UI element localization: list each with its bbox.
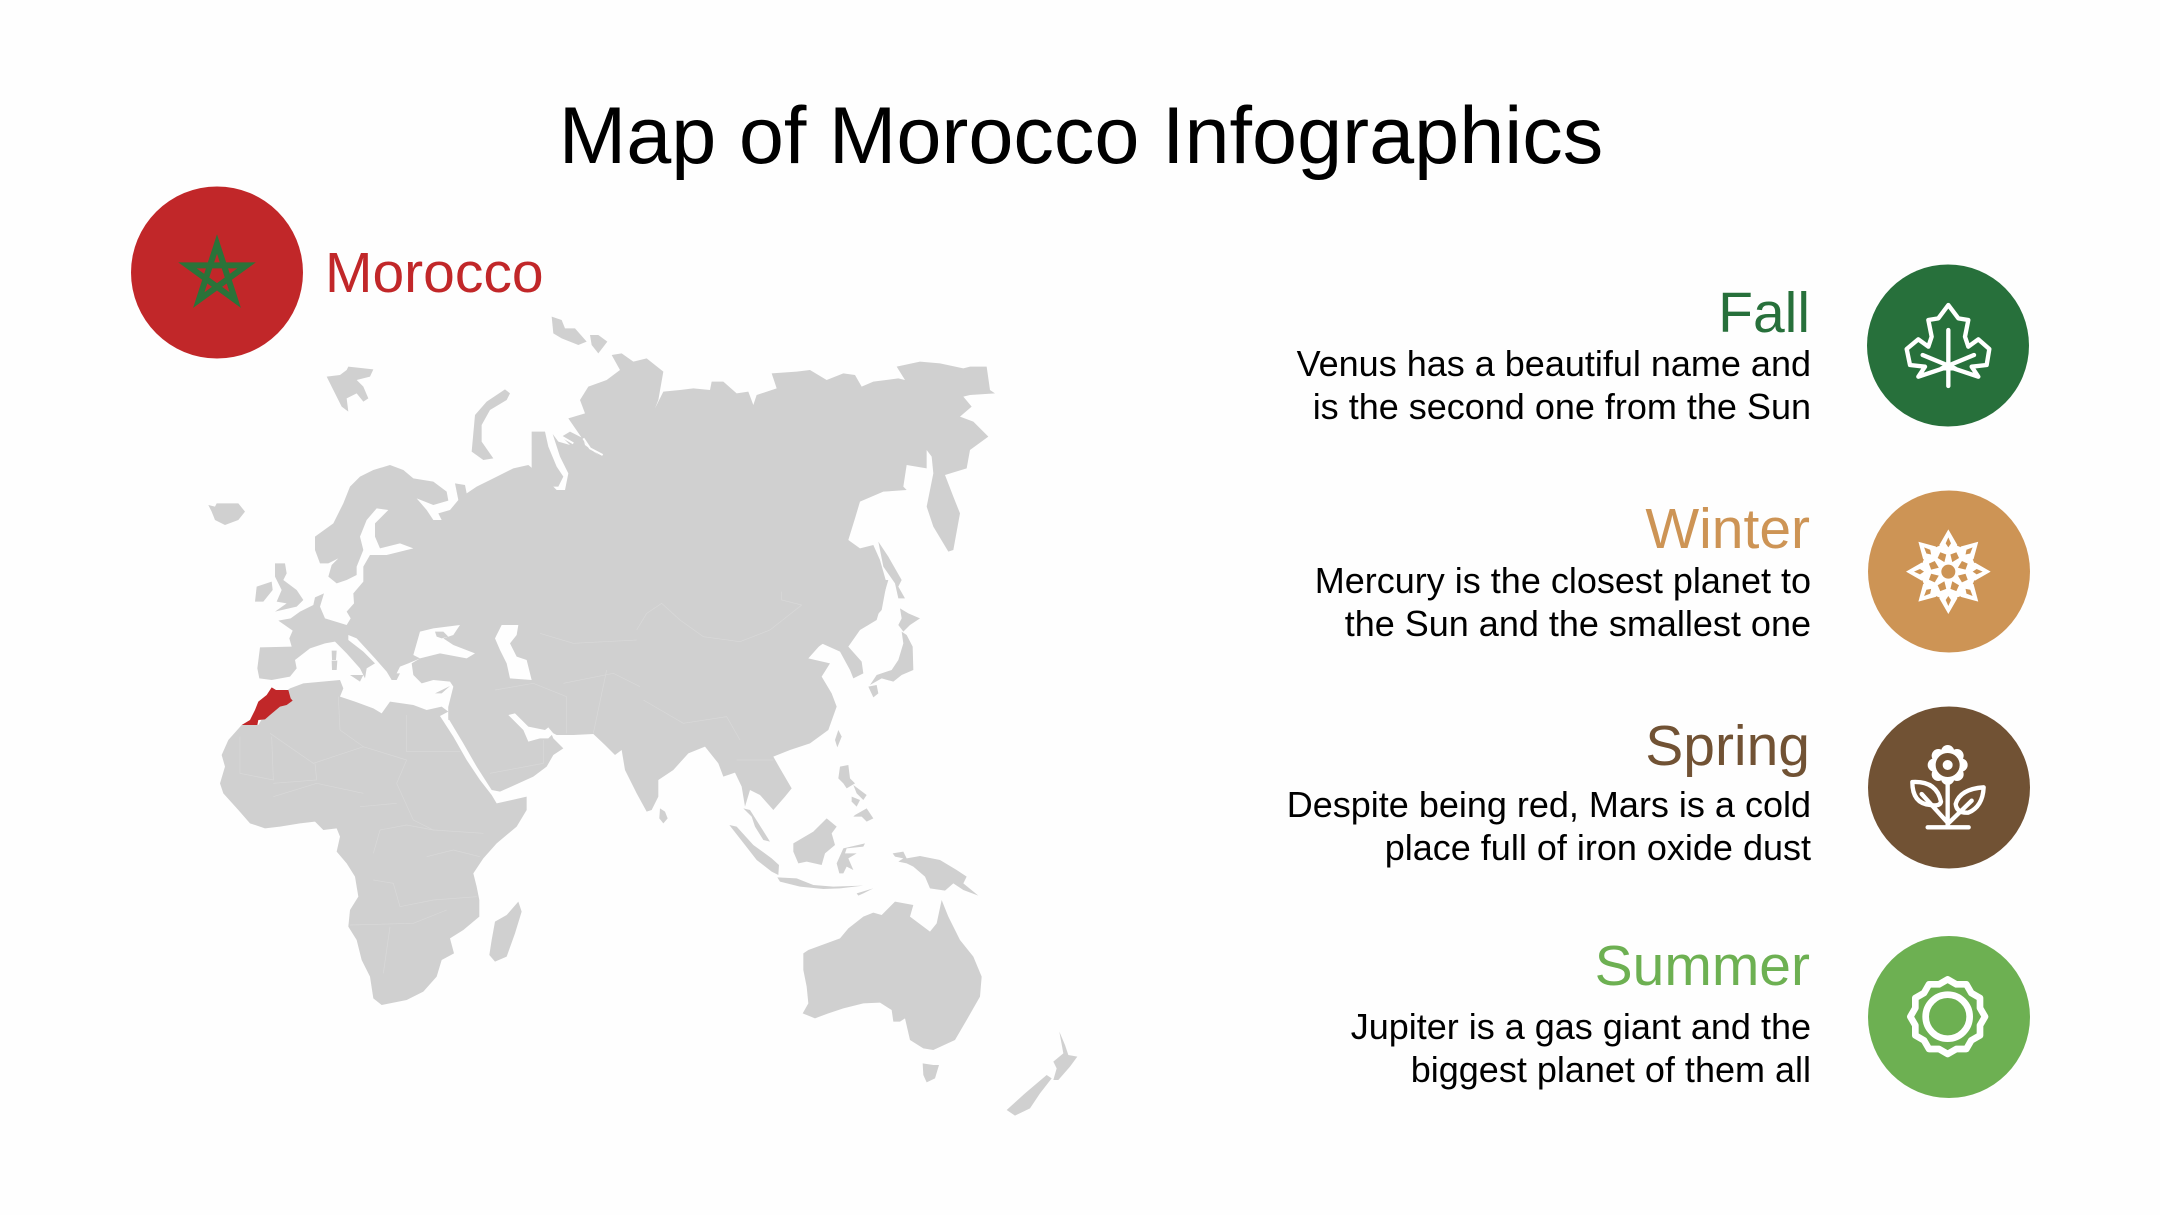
item: Spring — [1287, 706, 2030, 868]
icon: flower — [1912, 745, 1984, 827]
icon: maple leaf — [1907, 305, 1989, 386]
Winter circle — [1868, 490, 2030, 652]
item: Winter — [1315, 490, 2030, 652]
title: Map of Morocco Infographics — [559, 91, 1603, 181]
country label: Morocco — [325, 241, 544, 305]
Fall circle — [1867, 264, 2029, 426]
country borders — [240, 670, 607, 973]
item: Summer — [1351, 934, 2030, 1098]
Winter heading: Winter — [1645, 497, 1810, 561]
Summer description: Jupiter is a gas giant and the — [1351, 1006, 1811, 1047]
icon: sun badge — [1910, 979, 1985, 1054]
Summer circle — [1868, 936, 2030, 1098]
Spring description: Despite being red, Mars is a cold — [1287, 784, 1811, 825]
Winter description: Mercury is the closest planet to — [1315, 560, 1811, 601]
Spring circle — [1868, 706, 2030, 868]
item: Fall — [1297, 264, 2029, 427]
Spring heading: Spring — [1645, 714, 1810, 778]
Summer description: biggest planet of them all — [1411, 1049, 1811, 1090]
Morocco highlighted — [242, 687, 293, 725]
icon: snowflake — [1906, 529, 1991, 614]
Fall heading: Fall — [1718, 281, 1810, 345]
inland seas and gulfs — [413, 625, 532, 680]
Spring description: place full of iron oxide dust — [1385, 827, 1811, 868]
Fall description: Venus has a beautiful name and — [1297, 343, 1811, 384]
Morocco flag badge — [131, 186, 303, 358]
icon: green pentagram — [188, 244, 246, 300]
world map — [208, 317, 1077, 1116]
Winter description: the Sun and the smallest one — [1345, 603, 1811, 644]
Fall description: is the second one from the Sun — [1313, 386, 1811, 427]
Summer heading: Summer — [1595, 934, 1810, 998]
